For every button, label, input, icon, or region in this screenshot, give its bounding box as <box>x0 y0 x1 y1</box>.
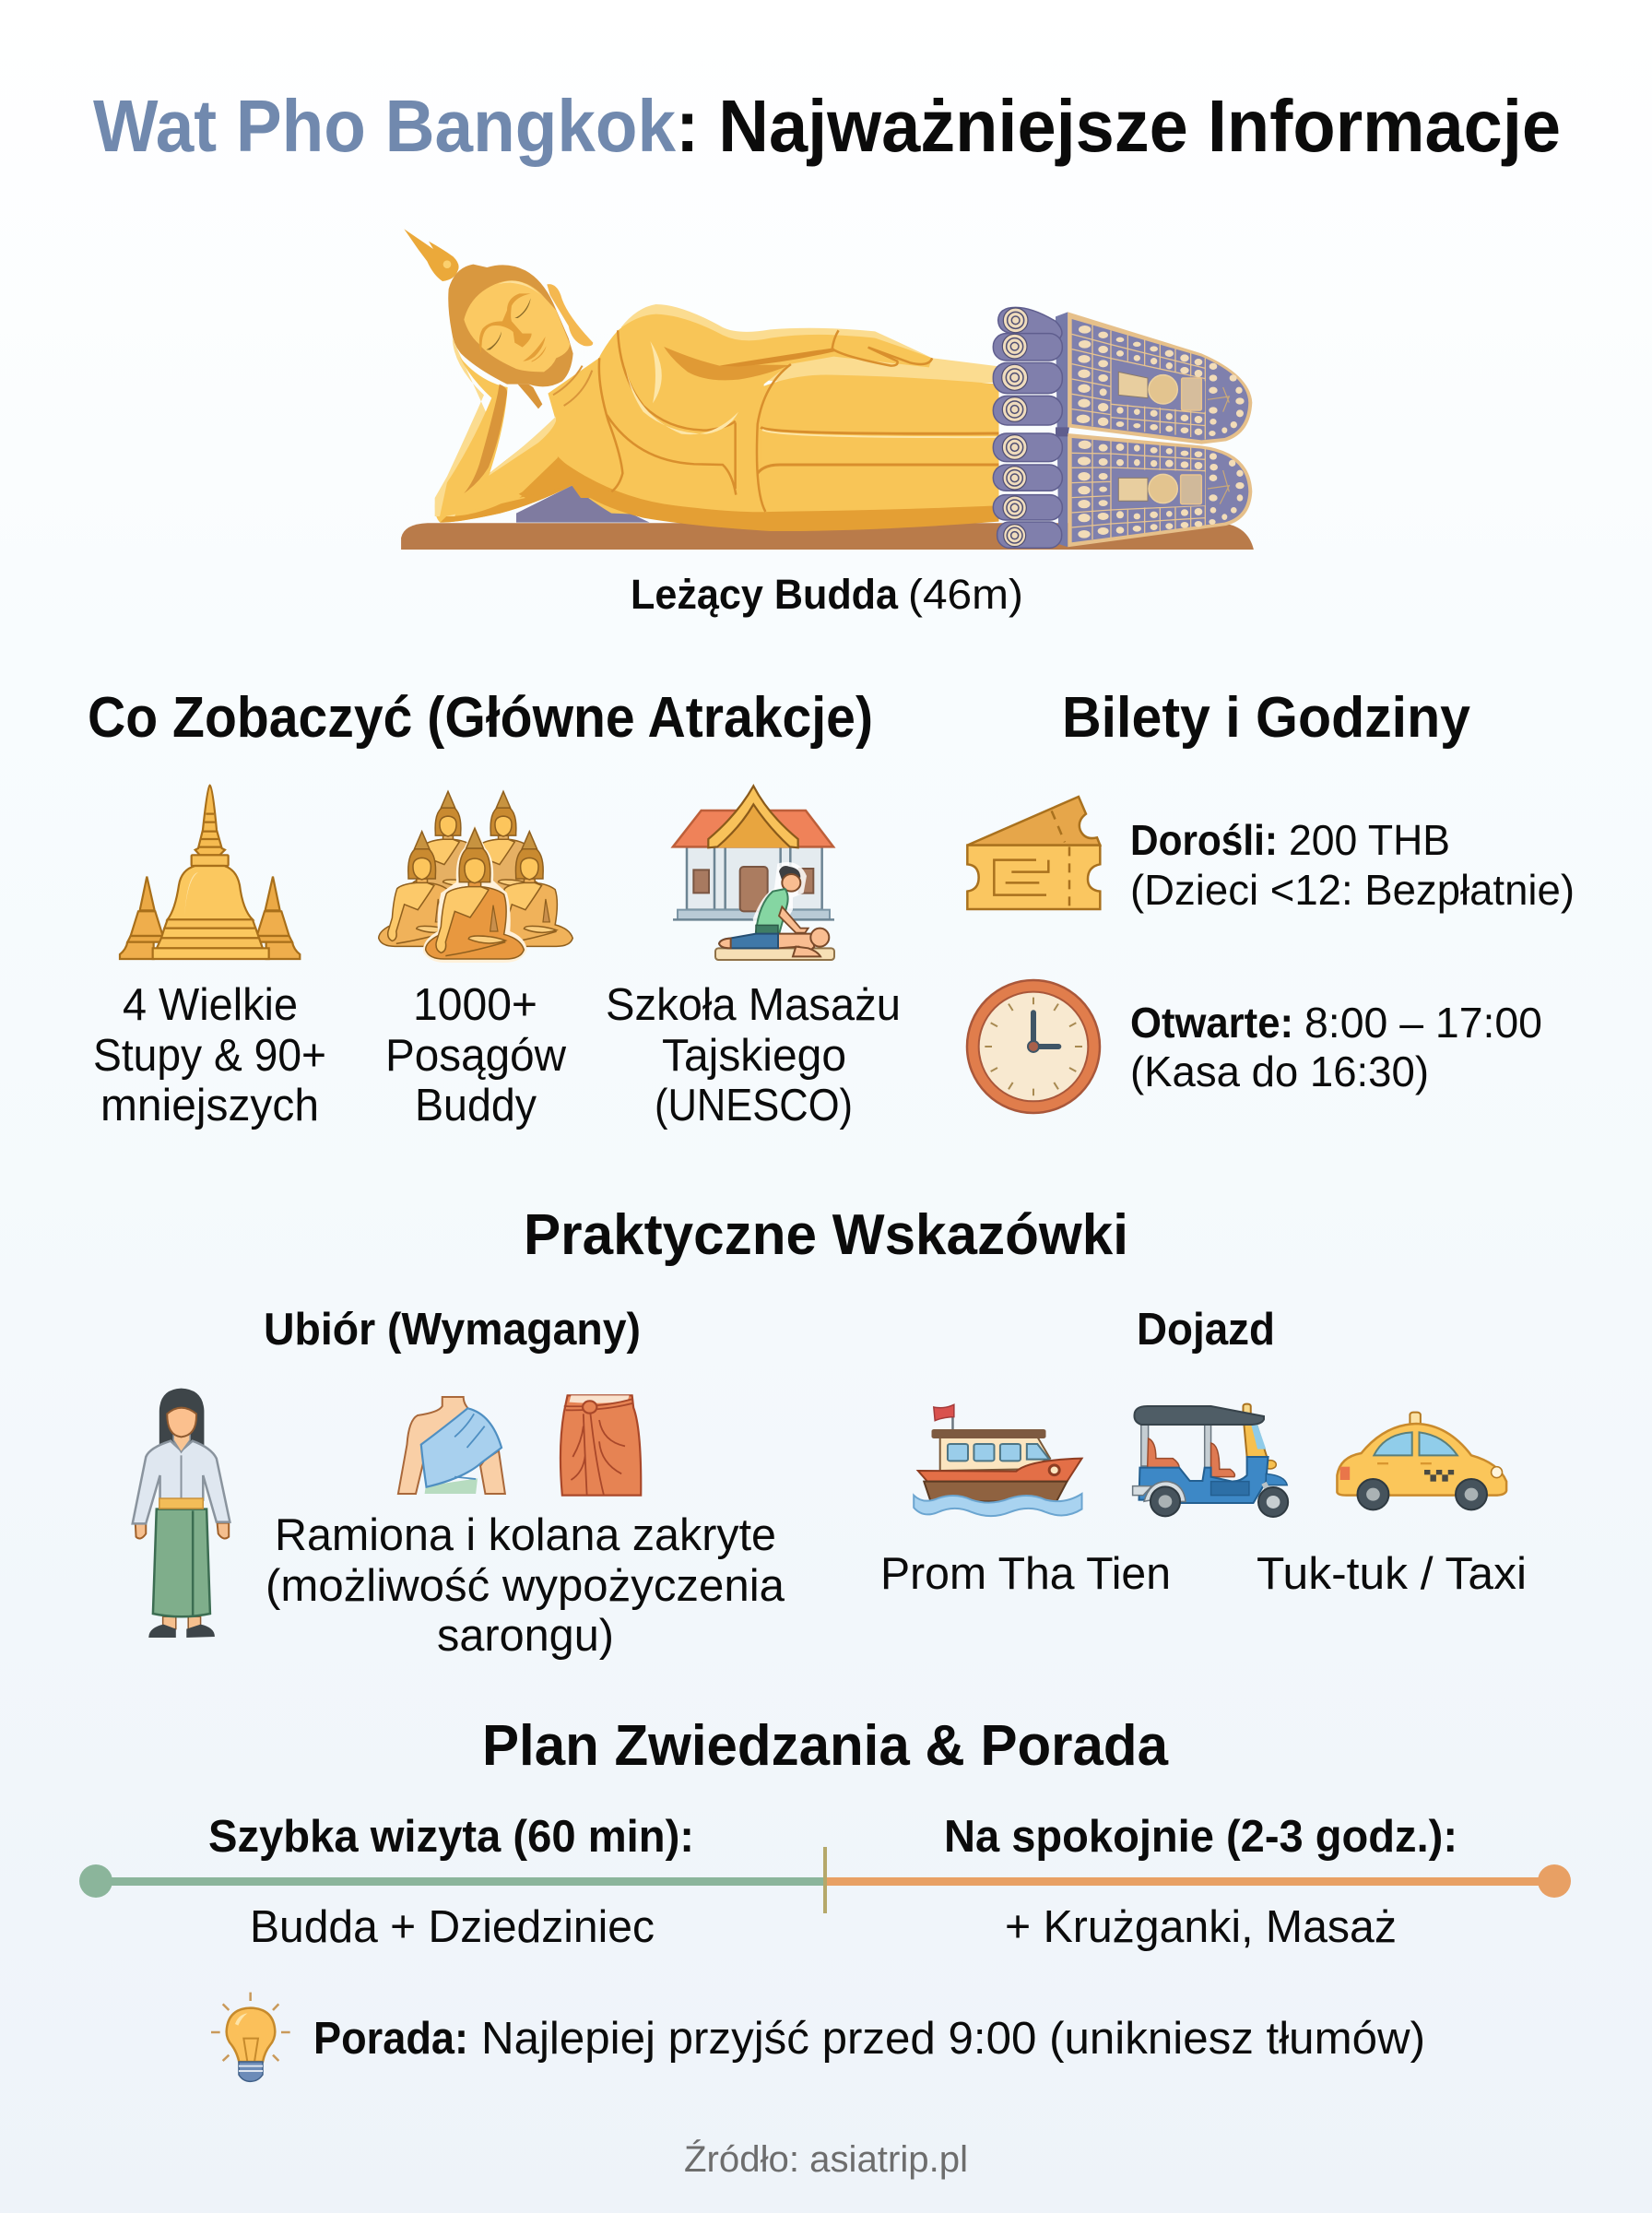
icon: ticket <box>967 797 1100 909</box>
heading: Co Zobaczyć: Co Zobaczyć (Główne Atrakcje) <box>88 686 873 750</box>
icon: covered shoulder <box>398 1397 505 1494</box>
icon: boat <box>914 1404 1082 1516</box>
text: quick visit detail: Budda + Dziedziniec <box>250 1902 655 1952</box>
body <box>435 304 998 531</box>
heading: Plan Zwiedzania: Plan Zwiedzania & Porada <box>482 1714 1168 1778</box>
text: quick visit heading: Szybka wizyta (60 min): <box>208 1812 694 1862</box>
icon: clock <box>967 980 1100 1113</box>
caption: reclining Buddha: (46m) <box>908 571 1023 618</box>
text: opening hours: (Kasa do 16:30) <box>1130 1047 1429 1095</box>
text: massage school label: (UNESCO) <box>655 1081 853 1130</box>
heading: Bilety i Godziny: Bilety i Godziny <box>1062 686 1470 750</box>
text: adult ticket price: Dorośli: <box>1130 816 1278 864</box>
text: opening hours: 8:00 – 17:00 <box>1304 999 1542 1047</box>
text: statues label: 1000+ <box>413 980 537 1030</box>
icon: stupas <box>120 786 300 959</box>
heading: Dojazd: Dojazd <box>1137 1305 1275 1355</box>
icon: tuk-tuk <box>1133 1404 1288 1517</box>
icon: massage school <box>673 786 834 960</box>
icon: woman in sarong <box>133 1389 230 1638</box>
text: slow visit heading: Na spokojnie (2-3 godz.): <box>944 1812 1457 1862</box>
text: statues label: Posągów <box>385 1031 567 1081</box>
text: massage school label: Tajskiego <box>662 1031 846 1081</box>
text: statues label: Buddy <box>415 1081 537 1130</box>
text: adult ticket price: 200 THB <box>1289 816 1450 864</box>
text: statues label <box>385 980 567 1130</box>
base platform <box>401 523 1254 550</box>
text: opening hours: Otwarte: <box>1130 999 1293 1047</box>
heading: Praktyczne Wskazówki: Praktyczne Wskazówki <box>524 1203 1128 1267</box>
icon: reclining Buddha <box>401 229 1254 550</box>
heading: Ubiór: Ubiór (Wymagany) <box>264 1305 641 1355</box>
text: slow visit detail: + Krużganki, Masaż <box>1005 1902 1397 1952</box>
text: tip: Najlepiej przyjść przed 9:00 (unikniesz tłumów) <box>481 2014 1425 2064</box>
title: : Najważniejsze Informacje <box>676 85 1561 167</box>
text: adult ticket price: (Dzieci <12: Bezpłatnie) <box>1130 866 1575 914</box>
text: stupas label: 4 Wielkie <box>123 980 298 1030</box>
text: massage school label: Szkoła Masażu <box>606 980 901 1030</box>
timeline <box>79 1847 1571 1913</box>
text: stupas label: mniejszych <box>100 1081 319 1130</box>
text: massage school label <box>606 980 901 1130</box>
title: Wat Pho Bangkok <box>93 85 676 167</box>
icon: light bulb <box>211 1993 290 2081</box>
text: adult ticket price <box>1130 816 1575 914</box>
text: dress code <box>266 1510 785 1661</box>
text: dress code: Ramiona i kolana zakryte <box>275 1510 776 1560</box>
text: opening hours <box>1130 999 1542 1095</box>
text: dress code: sarongu) <box>437 1611 614 1661</box>
icon: taxi <box>1337 1413 1506 1509</box>
icon: Buddha statues <box>379 791 572 963</box>
text: stupas label: Stupy & 90+ <box>93 1031 326 1081</box>
icon: sarong <box>560 1395 641 1496</box>
text: tuk-tuk label: Tuk-tuk / Taxi <box>1257 1549 1527 1599</box>
head and arm <box>404 229 624 518</box>
soles of the feet <box>993 307 1252 548</box>
title <box>93 85 1561 167</box>
text: stupas label <box>93 980 326 1130</box>
caption: reclining Buddha: Leżący Budda <box>631 571 899 618</box>
text: dress code: (możliwość wypożyczenia <box>266 1561 785 1611</box>
source: Źródło: asiatrip.pl <box>684 2138 968 2180</box>
text: river boat label: Prom Tha Tien <box>880 1549 1171 1599</box>
text: tip: Porada: <box>313 2014 468 2064</box>
